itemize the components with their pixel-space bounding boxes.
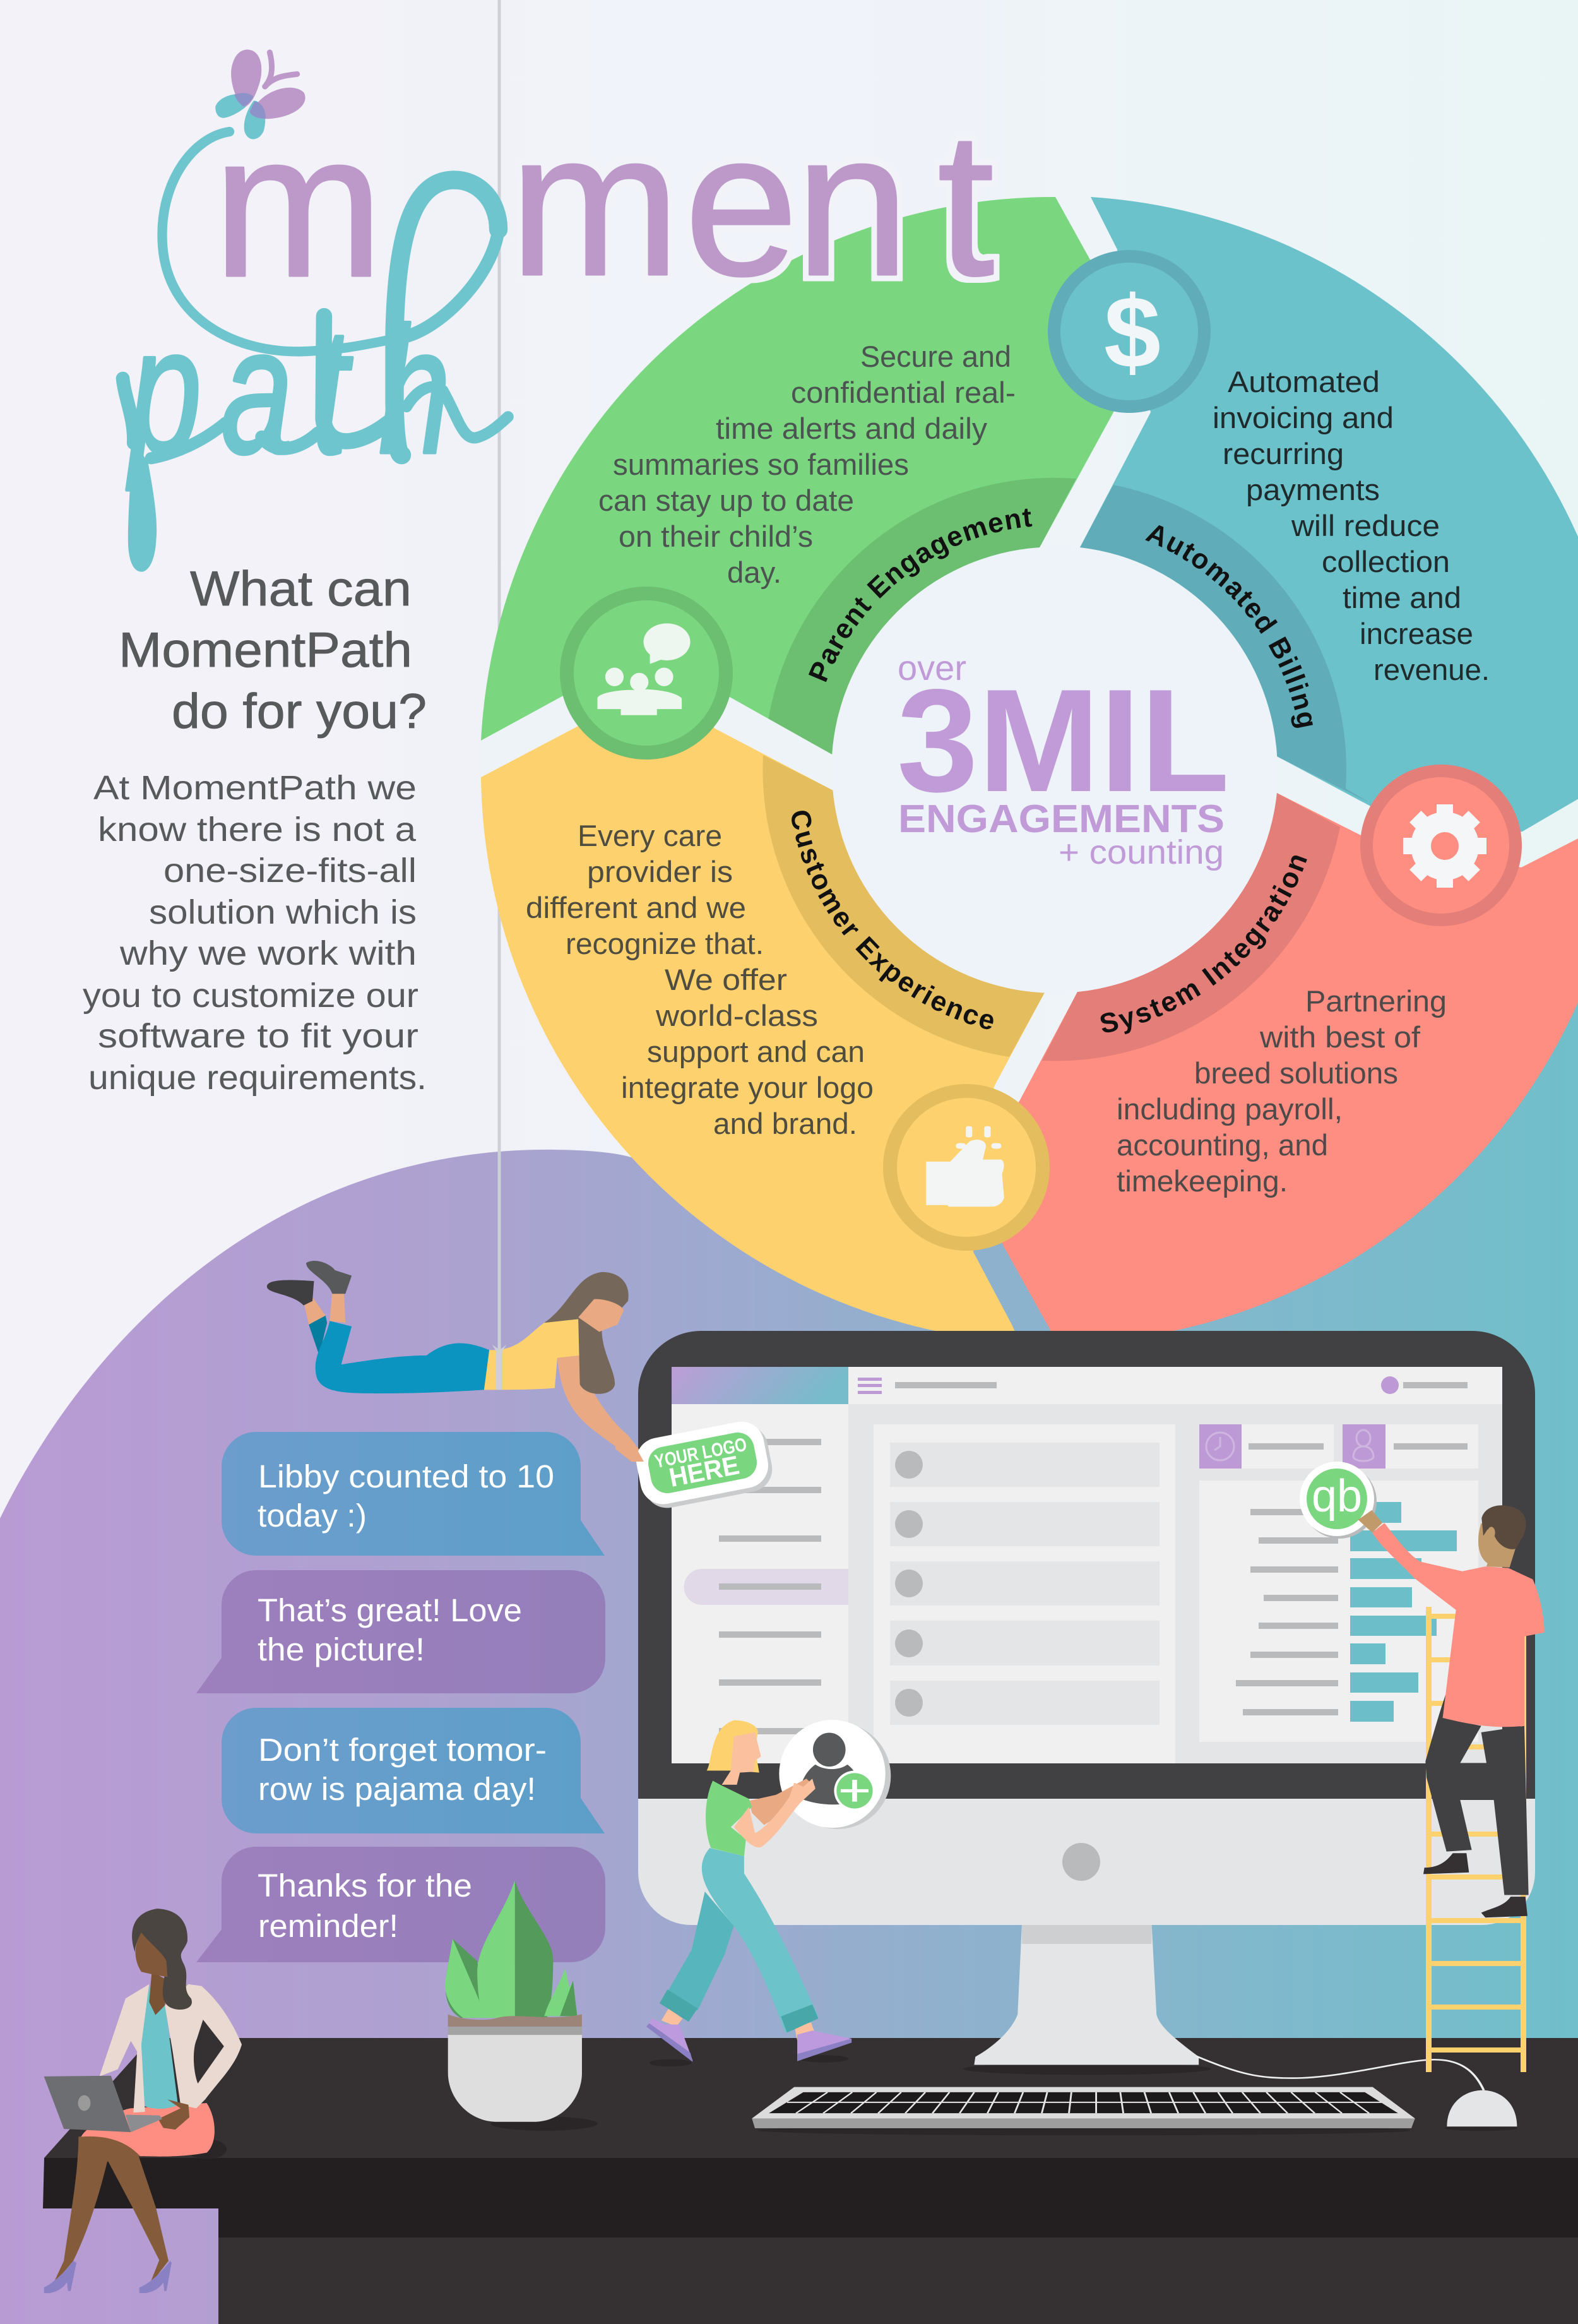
text block: parent engagement: day. — [727, 556, 781, 589]
sticker: your logo here: HERE — [667, 1450, 742, 1493]
text block: parent engagement: can stay up to date — [598, 484, 854, 517]
intro paragraph: solution which is — [149, 893, 417, 931]
shirt — [1372, 1523, 1545, 1727]
text block: automated billing: time and — [1343, 581, 1461, 614]
text block: customer experience: world-class — [655, 999, 818, 1032]
pants — [1425, 1692, 1529, 1895]
text block: parent engagement: summaries so families — [613, 448, 909, 481]
chat bubble: pajama day: Don’t forget tomor- — [258, 1732, 547, 1768]
text block: parent engagement: confidential real- — [791, 376, 1016, 409]
text block: system integration: timekeeping. — [1117, 1164, 1288, 1198]
logo: butterfly — [215, 49, 306, 139]
figure: woman hanging from rope — [267, 1261, 646, 1464]
chat bubble: thanks — [196, 1847, 605, 1962]
text block: automated billing: revenue. — [1373, 653, 1490, 686]
text block: customer experience: recognize that. — [566, 927, 764, 960]
ear — [1488, 1527, 1495, 1539]
face and neck — [721, 1732, 761, 1785]
centre stat: 3MIL engagements: over — [898, 648, 966, 688]
gap bands between the wheel segments — [481, 657, 833, 790]
hair — [132, 1909, 192, 2010]
text block: system integration: including payroll, — [1117, 1092, 1343, 1126]
text block: automated billing: payments — [1246, 473, 1380, 506]
hand — [1358, 1510, 1382, 1533]
chat bubble: That's great: That’s great! Love — [258, 1592, 522, 1628]
text block: customer experience: and brand. — [713, 1107, 857, 1140]
intro paragraph — [83, 769, 427, 1097]
intro paragraph: unique requirements. — [88, 1059, 427, 1097]
services wheel — [481, 197, 1578, 1344]
monitor chin — [638, 1799, 1535, 1925]
text block: automated billing: collection — [1322, 545, 1450, 578]
text block: parent engagement: Secure and — [860, 340, 1011, 373]
front calf — [329, 1290, 345, 1323]
potted plant — [445, 1880, 598, 2131]
icon: system gear coin — [1360, 765, 1522, 926]
menu icon — [858, 1378, 882, 1394]
rope tie — [492, 1345, 507, 1390]
chat bubble: That's great: the picture! — [258, 1631, 425, 1667]
bar chart card — [1199, 1481, 1478, 1742]
keyboard — [752, 2087, 1415, 2135]
sticker: your logo here: YOUR LOGO — [653, 1434, 749, 1472]
text block: parent engagement: time alerts and daily — [716, 412, 988, 445]
centre circle — [832, 547, 1278, 993]
logo wordmark: m: m — [213, 90, 384, 319]
hand — [158, 2099, 189, 2130]
text block: parent engagement: on their child’s — [619, 520, 813, 553]
text block: customer experience — [526, 819, 874, 1140]
quickbooks badge — [1300, 1462, 1377, 1539]
top bar items — [895, 1382, 1468, 1388]
logo: swirl stroke — [123, 132, 508, 572]
face — [578, 1299, 624, 1332]
screen — [672, 1367, 1502, 1763]
hair — [707, 1720, 759, 1773]
ankles — [661, 2008, 682, 2027]
monitor logo dot — [1062, 1843, 1100, 1881]
text block: system integration: breed solutions — [1194, 1056, 1398, 1090]
text block: automated billing: will reduce — [1291, 509, 1440, 542]
back leg — [661, 1892, 734, 2010]
text block: automated billing: invoicing and — [1213, 401, 1394, 434]
centre list panel — [874, 1424, 1175, 1763]
heading: What can MomentPath do for you?: do for you? — [172, 683, 427, 739]
text block: parent engagement — [598, 340, 1016, 589]
figure: walking woman with new user badge — [646, 1720, 891, 2066]
front leg — [702, 1848, 819, 2032]
intro paragraph: software to fit your — [98, 1017, 418, 1055]
chat bubble: pajama day — [222, 1708, 605, 1833]
centre stat: 3MIL engagements: + counting — [1059, 833, 1224, 871]
back arm — [749, 1779, 816, 1825]
text block: system integration: with best of — [1259, 1020, 1421, 1054]
logo wordmark: ment: ment — [509, 89, 995, 318]
icon: billing dollar coin — [1048, 250, 1211, 413]
bare legs — [304, 1296, 326, 1325]
text block: automated billing: recurring — [1223, 437, 1344, 470]
logo wordmark: path: path — [126, 290, 451, 491]
icon: customer thumbs-up coin — [883, 1084, 1050, 1251]
monitor — [638, 1331, 1535, 2075]
laptop — [126, 2115, 162, 2132]
text block: automated billing — [1213, 365, 1490, 686]
hair — [544, 1272, 629, 1394]
logo: MomentPath — [123, 49, 995, 572]
plant pot — [448, 2015, 582, 2027]
shoes — [646, 2018, 693, 2061]
centre stat: 3MIL engagements: 3MIL — [897, 659, 1230, 823]
heading: What can MomentPath do for you?: What can — [190, 561, 412, 616]
stat card: person — [1343, 1424, 1478, 1469]
heading: What can MomentPath do for you? — [119, 561, 427, 739]
hair — [1481, 1505, 1526, 1549]
sidebar header — [672, 1367, 848, 1404]
rope — [497, 0, 501, 1390]
other shoe — [306, 1261, 352, 1294]
ladder — [1426, 1607, 1526, 2072]
segment: system integration — [966, 793, 1578, 1344]
text block: system integration — [1117, 984, 1447, 1198]
gradient arch backdrop — [0, 909, 1578, 2324]
sticker: your logo here — [632, 1417, 776, 1513]
shoe — [267, 1280, 314, 1306]
text block: system integration: accounting, and — [1117, 1128, 1328, 1162]
curved label: System Integration: System Integration — [1101, 855, 1307, 1034]
segment: customer experience — [481, 673, 1045, 1342]
text block: system integration: Partnering — [1305, 984, 1447, 1018]
text block: customer experience: integrate your logo — [621, 1071, 874, 1104]
neck — [149, 1972, 169, 2015]
chat bubble: Libby counted to 10: today :) — [258, 1498, 367, 1534]
mouse and cord — [1195, 2056, 1517, 2131]
intro paragraph: one-size-fits-all — [163, 852, 417, 890]
text block: customer experience: provider is — [587, 855, 733, 888]
text block: customer experience: We offer — [665, 963, 787, 996]
segment: parent engagement — [481, 197, 1130, 755]
cuffs — [660, 1989, 697, 2022]
pants — [316, 1321, 489, 1393]
monitor bezel — [638, 1331, 1535, 1799]
legs — [107, 2156, 169, 2261]
chat bubble: pajama day: row is pajama day! — [258, 1771, 536, 1807]
text block: automated billing: increase — [1360, 617, 1473, 650]
figure: man on ladder — [1300, 1462, 1545, 2072]
text block: customer experience: support and can — [647, 1035, 865, 1068]
hand holding sticker — [615, 1433, 644, 1462]
icon: billing dollar coin: $ — [1104, 275, 1161, 390]
quickbooks badge: qb — [1312, 1471, 1362, 1522]
shoes — [1423, 1853, 1469, 1874]
jacket — [100, 1984, 149, 2112]
sidebar highlight — [684, 1569, 848, 1605]
intro paragraph: know there is not a — [98, 811, 417, 849]
segment: automated billing — [1080, 197, 1578, 845]
intro paragraph: why we work with — [119, 934, 417, 972]
text block: customer experience: Every care — [578, 819, 722, 852]
text block: automated billing: Automated — [1228, 365, 1380, 398]
shirt — [484, 1318, 580, 1390]
chat bubble: Libby counted to 10: Libby counted to 10 — [258, 1458, 554, 1494]
user dot — [1381, 1376, 1399, 1394]
plant leaves — [445, 1880, 577, 2018]
desk — [43, 2038, 1578, 2324]
head — [1478, 1523, 1516, 1568]
arm — [557, 1356, 646, 1464]
centre stat: 3MIL engagements: ENGAGEMENTS — [898, 797, 1225, 841]
heading: What can MomentPath do for you?: MomentPath — [119, 622, 412, 677]
front arm — [734, 1779, 816, 1847]
skirt — [81, 2103, 215, 2157]
shoes — [44, 2261, 172, 2293]
curved label: Automated Billing: Automated Billing — [1145, 525, 1313, 728]
blouse — [141, 1986, 178, 2109]
shirt — [706, 1780, 752, 1856]
chat bubble: thanks: Thanks for the — [258, 1868, 472, 1904]
stat card: clock — [1199, 1424, 1334, 1469]
intro paragraph: you to customize our — [83, 977, 418, 1015]
text block: customer experience: different and we — [526, 891, 746, 924]
man — [1358, 1505, 1545, 1917]
chat bubble: thanks: reminder! — [258, 1908, 398, 1944]
back leg — [309, 1316, 327, 1356]
curved label: Parent Engagement: Parent Engagement — [808, 509, 1033, 682]
figure: seated woman with laptop — [44, 1909, 242, 2293]
user badge — [779, 1720, 891, 1829]
chat bubble: Libby counted to 10 — [222, 1432, 605, 1556]
curved label: Customer Experience: Customer Experience — [792, 811, 994, 1029]
chat bubble: That's great — [196, 1570, 605, 1693]
monitor stand — [963, 1925, 1211, 2075]
face — [136, 1933, 167, 1977]
icon: parent chat group coin — [560, 587, 733, 760]
intro paragraph: At MomentPath we — [93, 769, 417, 807]
sidebar items — [719, 1439, 821, 1734]
